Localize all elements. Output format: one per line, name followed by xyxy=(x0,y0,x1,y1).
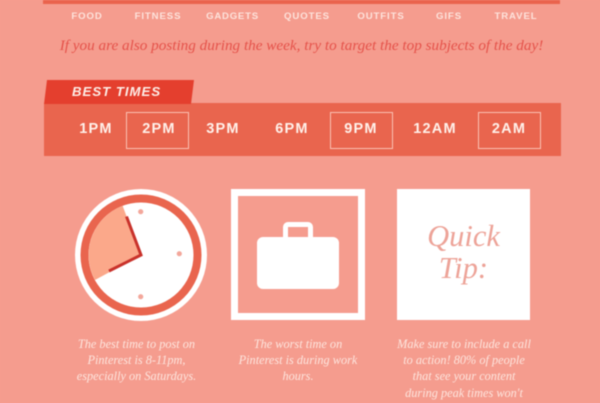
time list: 2PM xyxy=(142,121,176,137)
subject advice sentence: If you are also posting during the week, try to target the top subjects of the day! xyxy=(60,37,543,54)
quick tip text: Tip: xyxy=(439,251,488,285)
caption: worst time: The worst time on xyxy=(254,337,342,351)
best times heading: BEST TIMES xyxy=(72,84,161,99)
quick tip text xyxy=(427,219,501,286)
caption: best time: Pinterest is 8-11pm, xyxy=(87,353,186,367)
caption: quick tip: that see your content xyxy=(413,369,515,383)
caption: quick tip: Make sure to include a call xyxy=(397,337,531,351)
caption: best time: especially on Saturdays. xyxy=(77,369,196,383)
caption: worst time: hours. xyxy=(282,369,314,383)
quick tip text: Quick xyxy=(427,219,500,253)
icon: briefcase panel xyxy=(231,189,365,320)
best times band xyxy=(44,103,561,156)
time list xyxy=(79,112,542,150)
category labels: FITNESS xyxy=(135,10,181,22)
icon: clock xyxy=(74,188,208,322)
caption: quick tip xyxy=(397,337,531,400)
time list: 9PM xyxy=(344,121,378,137)
category labels: TRAVEL xyxy=(494,11,538,22)
icon: briefcase xyxy=(256,221,340,290)
time list: 6PM xyxy=(275,121,309,137)
caption: worst time xyxy=(238,337,358,383)
category labels: OUTFITS xyxy=(357,11,405,22)
caption: worst time: Pinterest is during work xyxy=(239,353,357,367)
caption: quick tip: to action! 80% of people xyxy=(403,353,525,367)
caption: best time: The best time to post on xyxy=(78,337,195,351)
category labels: GIFS xyxy=(436,11,462,22)
best times tab xyxy=(44,80,194,104)
time list: 2AM xyxy=(492,121,526,137)
category labels: GADGETS xyxy=(206,10,259,22)
caption: best time xyxy=(76,337,196,383)
category labels: FOOD xyxy=(71,10,103,22)
caption: quick tip: during peak times won't xyxy=(405,386,523,400)
time list: 3PM xyxy=(206,121,240,137)
quick tip panel xyxy=(397,189,530,320)
time list: 12AM xyxy=(413,121,457,137)
top bar xyxy=(43,0,560,4)
time list: 1PM xyxy=(79,121,113,137)
category labels: QUOTES xyxy=(284,11,330,22)
category labels xyxy=(71,10,538,22)
